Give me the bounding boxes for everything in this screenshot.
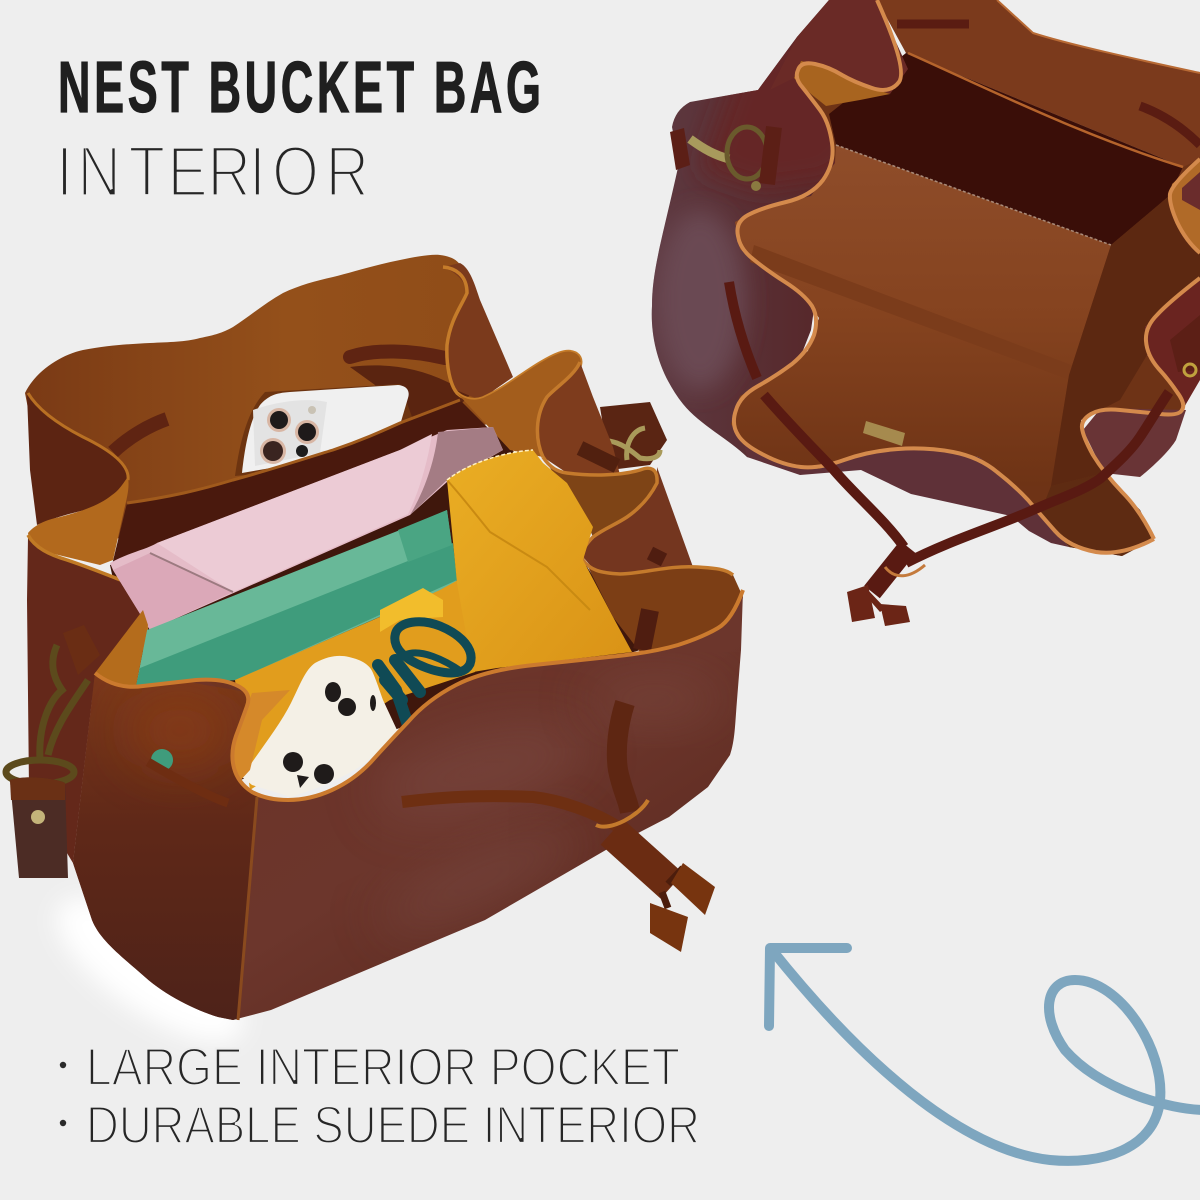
bullet: large interior pocket: LARGE INTERIOR POCKET — [86, 1038, 680, 1097]
right upper fold — [1145, 278, 1200, 404]
suede fold — [457, 351, 581, 457]
green book — [136, 510, 457, 686]
dark back wall — [829, 53, 1183, 245]
floor — [731, 145, 1111, 486]
left suede flap — [28, 477, 129, 565]
heading: interior: INTERIOR — [56, 131, 369, 211]
teal scissors — [378, 622, 471, 725]
suede middle fold — [543, 457, 657, 537]
drawstring — [402, 703, 683, 908]
outer leather — [652, 0, 902, 458]
green hole and side string — [148, 749, 228, 803]
upper right rim — [1170, 159, 1200, 253]
right back fold rim — [443, 267, 581, 400]
back strap left — [113, 419, 167, 452]
brass clasp right with leather back — [590, 402, 667, 470]
back pocket leather — [112, 400, 490, 565]
front orange rim — [95, 590, 743, 800]
back strap right — [350, 351, 445, 358]
lower strap tab — [642, 610, 650, 650]
top suede edge — [997, 0, 1200, 73]
photo: left bag with contents — [6, 255, 743, 1067]
right strap tab — [1170, 315, 1200, 372]
dark interior base — [110, 430, 640, 780]
heading: nest bucket bag: NEST BUCKET BAG — [58, 46, 541, 128]
orange rims — [734, 0, 1200, 553]
arrow: hand drawn loop pointing to the top bag — [769, 948, 1200, 1161]
top suede wall — [877, 0, 1200, 167]
left back leather flap — [27, 395, 128, 525]
right brass ring — [1184, 364, 1196, 376]
top left fold leather — [770, 0, 908, 94]
bullet list — [60, 1038, 700, 1155]
leather fold lower — [583, 467, 693, 575]
top right inner fold — [1182, 172, 1200, 210]
back wall suede — [25, 255, 500, 540]
suede tuck — [794, 61, 890, 106]
photo: right bag from above — [640, 0, 1200, 626]
phone — [242, 385, 409, 473]
back stitching — [836, 145, 1111, 245]
yellow zip pouch — [235, 580, 475, 790]
pink pouch — [110, 427, 503, 630]
front leather wall — [73, 590, 743, 1020]
phone pocket recess — [235, 384, 415, 476]
upper straps in suede — [897, 24, 1200, 145]
white cloth with dots — [242, 656, 397, 797]
left side leather panel — [27, 537, 147, 863]
brass label — [863, 421, 905, 446]
pocket stitched band — [750, 245, 1079, 382]
drawstring tube upper — [580, 448, 617, 466]
suede bottom flap — [583, 557, 743, 652]
grain leather fold upper — [537, 362, 620, 475]
lower flap suede — [1040, 473, 1154, 556]
left panel rim — [28, 535, 147, 650]
right back fold leather — [443, 263, 513, 400]
strap knots — [847, 585, 910, 626]
back pocket edge — [127, 400, 460, 503]
drawstring — [729, 282, 1169, 592]
brass clasp — [670, 127, 774, 191]
wall shading — [55, 660, 725, 1030]
lower front strip — [744, 445, 1069, 547]
yellow case — [447, 450, 632, 672]
side seam — [238, 797, 257, 1020]
soft white floor shadow — [36, 873, 264, 1067]
left flap rim — [28, 393, 128, 480]
right suede fold — [1169, 159, 1200, 253]
suede lining behind front dip — [230, 690, 290, 783]
left inner suede at front corner — [95, 610, 148, 690]
left strap and clasp — [6, 625, 100, 878]
darker suede lower band behind strap — [350, 365, 470, 420]
zip pull — [380, 588, 443, 632]
right wall — [1051, 180, 1200, 486]
mid strap tab — [650, 553, 664, 560]
bullet: durable suede interior: DURABLE SUEDE INTERIOR — [86, 1096, 700, 1155]
interior — [731, 53, 1200, 556]
orange ring — [885, 565, 925, 576]
title — [56, 46, 541, 211]
strap knots — [650, 863, 715, 952]
flap rims — [537, 362, 733, 575]
suede upper seam — [908, 53, 1183, 167]
right lower leather — [1083, 408, 1186, 477]
